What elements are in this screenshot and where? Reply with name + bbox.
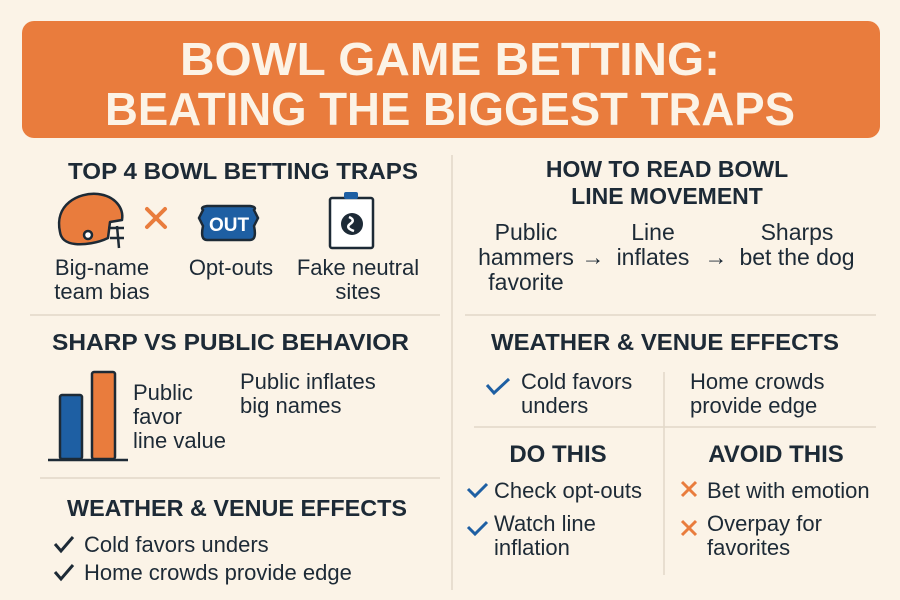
arrow 1: → — [582, 244, 604, 270]
label: fake neutral sites: sites — [335, 279, 381, 304]
panel: sharp vs public — [48, 329, 409, 460]
heading: weather left: WEATHER & VENUE EFFECTS — [67, 495, 407, 521]
item: check opt-outs: Check opt-outs — [494, 478, 642, 503]
text: public favor line value: Public — [133, 380, 193, 405]
title: BOWL GAME BETTING: — [180, 33, 720, 85]
item: watch line inflation — [468, 511, 596, 560]
step: public hammers favorite: Public — [495, 219, 557, 245]
item: overpay for favorites: favorites — [707, 535, 790, 560]
step: public hammers favorite — [478, 219, 574, 295]
text: public favor line value — [133, 380, 226, 453]
label: big-name bias — [54, 255, 150, 304]
label: fake neutral sites — [297, 255, 419, 304]
icon: clipboard — [330, 192, 373, 248]
label: opt-outs: Opt-outs — [189, 255, 273, 280]
heading: line movement — [546, 156, 788, 209]
item: home crowds — [690, 369, 824, 418]
step: sharps bet the dog: bet the dog — [739, 244, 855, 270]
title — [105, 33, 795, 135]
step: public hammers favorite: hammers — [478, 244, 574, 270]
item: cold favors unders: Cold favors unders — [84, 532, 269, 557]
panel: do this — [468, 441, 642, 560]
heading: line movement: HOW TO READ BOWL — [546, 156, 788, 182]
item: cold favors unders: unders — [521, 393, 588, 418]
heading: traps: TOP 4 BOWL BETTING TRAPS — [68, 158, 418, 184]
arrow 2: → — [704, 244, 728, 270]
panel: top 4 traps — [54, 158, 419, 304]
step: sharps bet the dog — [739, 219, 855, 270]
text: public favor line value: favor — [133, 404, 182, 429]
bar chart — [48, 372, 128, 460]
item: cold favors unders: Cold favors — [521, 369, 632, 394]
text: public inflates: Public inflates — [240, 369, 376, 394]
step: line inflates: Line — [631, 219, 675, 245]
icon: OUT badge: OUT — [209, 215, 249, 236]
heading: avoid this: AVOID THIS — [708, 441, 844, 468]
title banner — [22, 21, 880, 138]
panel: avoid this — [682, 441, 870, 560]
icon: x mark — [147, 209, 165, 227]
item: home crowds: Home crowds — [690, 369, 824, 394]
icon: helmet — [59, 194, 124, 248]
text: public favor line value: line value — [133, 428, 226, 453]
step: line inflates: inflates — [617, 244, 689, 270]
text: public inflates — [240, 369, 376, 418]
label: big-name bias: team bias — [54, 279, 150, 304]
label: big-name bias: Big-name — [55, 255, 149, 280]
heading: do this: DO THIS — [509, 441, 607, 468]
panel: weather left — [55, 495, 407, 585]
icon: OUT badge — [199, 206, 258, 240]
item: overpay for favorites — [682, 511, 822, 560]
item: watch line inflation: Watch line — [494, 511, 596, 536]
item: cold favors unders — [487, 369, 632, 418]
panel: weather right — [487, 329, 839, 418]
step: line inflates — [617, 219, 689, 270]
panel: line movement — [478, 156, 855, 295]
item: watch line inflation: inflation — [494, 535, 570, 560]
label: fake neutral sites: Fake neutral — [297, 255, 419, 280]
text: public inflates: big names — [240, 393, 342, 418]
heading: weather right: WEATHER & VENUE EFFECTS — [491, 329, 839, 355]
item: bet with emotion: Bet with emotion — [707, 478, 870, 503]
heading: line movement: LINE MOVEMENT — [571, 183, 763, 209]
step: sharps bet the dog: Sharps — [761, 219, 833, 245]
item: home crowds: provide edge — [690, 393, 817, 418]
step: public hammers favorite: favorite — [488, 269, 564, 295]
heading: sharp vs public: SHARP VS PUBLIC BEHAVIOR — [52, 329, 409, 355]
title: BEATING THE BIGGEST TRAPS — [105, 83, 795, 135]
item: overpay for favorites: Overpay for — [707, 511, 822, 536]
item: home crowds: Home crowds provide edge — [84, 560, 352, 585]
